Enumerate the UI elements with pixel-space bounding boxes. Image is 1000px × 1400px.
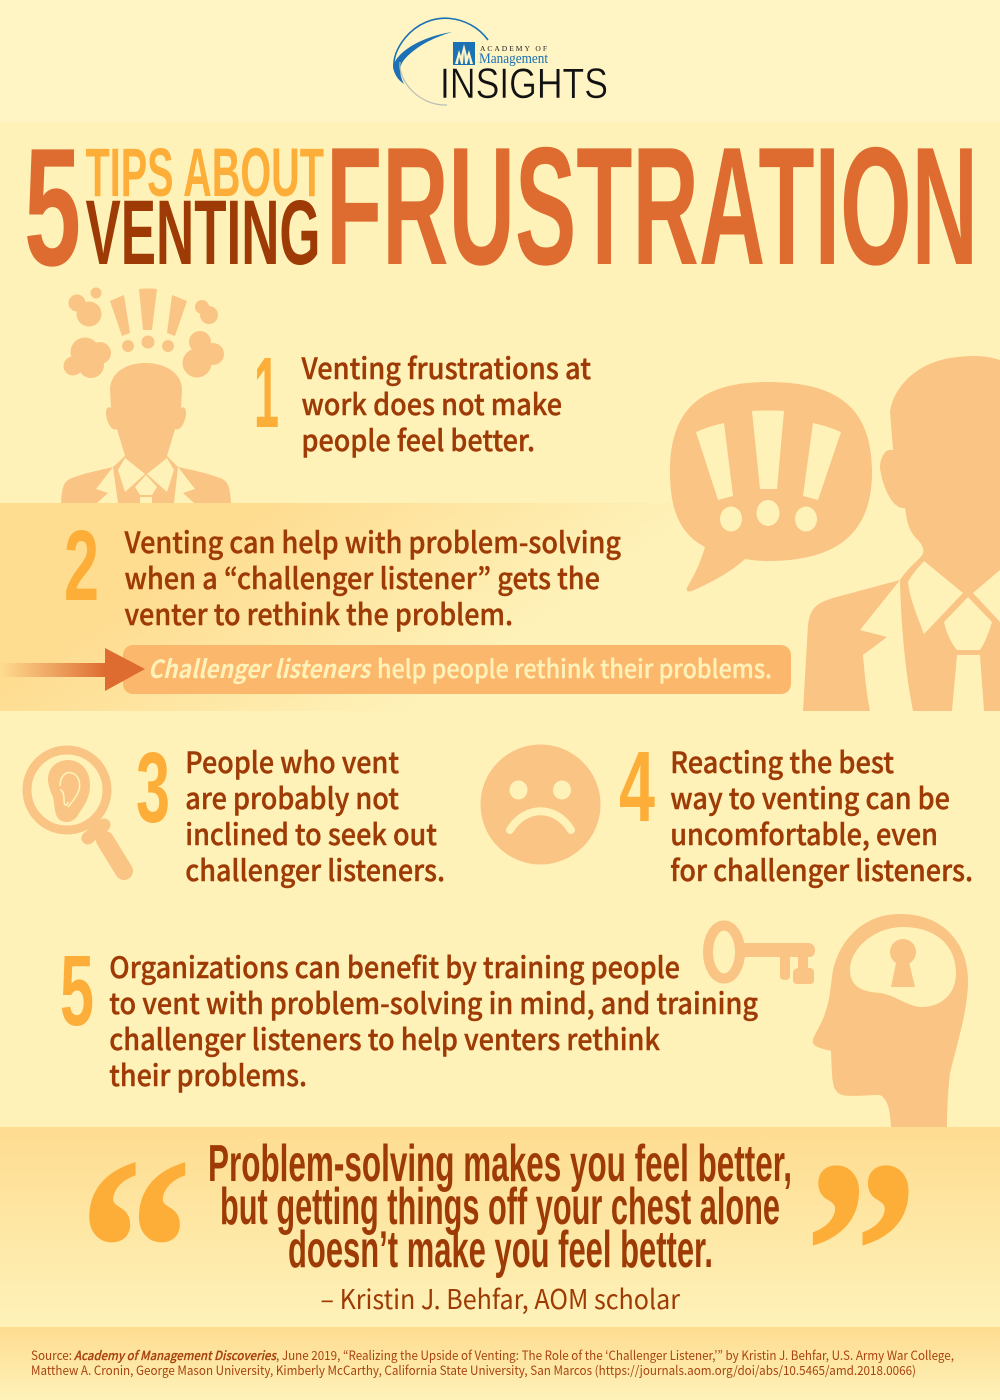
- tip 5 text: challenger listeners to help venters rethink: [109, 1017, 660, 1059]
- source citation: Academy of Management Discoveries: [74, 1345, 277, 1364]
- quote text: doesn’t make you feel better.: [288, 1221, 713, 1279]
- source citation: , June 2019, “Realizing the Upside of Venting: The Role of the ‘Challenger Listener,’” by Kristin J. Behfar, U.S. Army War College,: [276, 1345, 954, 1364]
- tip 3 number: 3: [136, 732, 170, 844]
- tip 2 text: when a “challenger listener” gets the: [124, 556, 600, 598]
- tip 5 text: Organizations can benefit by training people: [109, 945, 680, 987]
- tip 2 text: venter to rethink the problem.: [124, 592, 513, 634]
- logo: Academy of Management Insights: INSIGHTS: [440, 60, 608, 108]
- logo: Academy of Management Insights: Management: [479, 51, 549, 67]
- text: 1: [254, 337, 279, 449]
- tip 1 text: work does not make: [302, 382, 562, 424]
- source citation: Matthew A. Cronin, George Mason University, Kimberly McCarthy, California State University, San Marcos (https://journals.aom.org/doi/abs/10.5465/amd.2018.0066): [31, 1360, 916, 1379]
- tip 5 text: their problems.: [109, 1053, 307, 1095]
- tip 5 text: to vent with problem-solving in mind, and training: [109, 981, 758, 1023]
- quote text: [208, 1135, 792, 1279]
- tip 4 text: Reacting the best: [670, 740, 894, 782]
- icon: key: [708, 926, 815, 984]
- panel: tip 2 band: [0, 503, 1000, 711]
- callout: challenger listeners pill: [123, 645, 791, 694]
- source citation: [31, 1345, 954, 1379]
- tip 3 text: are probably not: [185, 776, 399, 818]
- tip 2 text: [124, 520, 621, 634]
- icon: large businessman silhouette: [803, 356, 1000, 711]
- tip 2 number: 2: [64, 510, 99, 622]
- callout: challenger listeners pill: Challenger listeners: [148, 650, 372, 686]
- icon: speech bubble with exclamation marks: [670, 382, 872, 592]
- title: TIPS ABOUT: [86, 134, 324, 211]
- tip 4 number: 4: [619, 731, 655, 843]
- tip 5 text: [109, 945, 758, 1095]
- source citation: Source:: [31, 1345, 72, 1364]
- panel: quote band: [0, 1127, 1000, 1327]
- tip 2 text: Venting can help with problem-solving: [124, 520, 621, 562]
- tip 3 text: inclined to seek out: [185, 812, 437, 854]
- icon: head with keyhole: [813, 914, 968, 1127]
- callout: challenger listeners pill: help people rethink their problems.: [377, 650, 772, 686]
- tip 4 text: uncomfortable, even: [670, 812, 938, 854]
- title: [24, 112, 978, 301]
- title: VENTING: [86, 182, 320, 284]
- tip 1 text: [301, 346, 591, 460]
- tip 3 text: People who vent: [185, 740, 399, 782]
- title: 5: [24, 113, 81, 301]
- arrow: [0, 648, 145, 691]
- icon: frustrated person: [61, 288, 231, 503]
- tip 1 text: people feel better.: [302, 418, 535, 460]
- panel: source band: [0, 1327, 1000, 1400]
- tip 5 number: 5: [60, 935, 94, 1047]
- quote mark: opening: “: [79, 1105, 192, 1393]
- logo: Academy of Management Insights: [393, 18, 608, 108]
- tip 4 text: for challenger listeners.: [670, 848, 973, 890]
- tip 4 text: way to venting can be: [670, 776, 950, 818]
- quote attribution: – Kristin J. Behfar, AOM scholar: [320, 1278, 680, 1317]
- icon: sad face: [480, 744, 600, 864]
- tip 1 text: Venting frustrations at: [301, 346, 591, 388]
- tip 3 text: [185, 740, 445, 890]
- tip 4 text: [670, 740, 973, 890]
- logo: Academy of Management Insights: ACADEMY OF: [480, 44, 547, 53]
- tip 3 text: challenger listeners.: [185, 848, 445, 890]
- quote mark: closing: ”: [805, 1108, 918, 1396]
- icon: magnifier with ear: [27, 750, 124, 871]
